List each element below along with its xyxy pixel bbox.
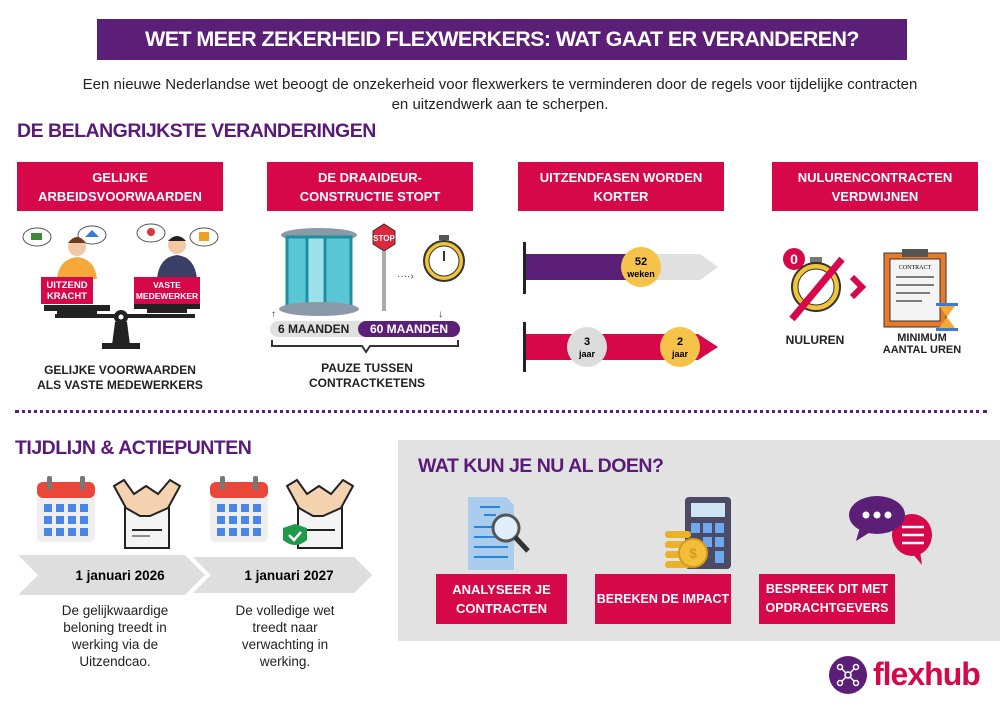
logo: flexhub: flexhub [873,656,980,692]
chevrons: dates: 1 januari 2027 [244,568,334,583]
revolving door, stop sign, stopwatch: ↓ [438,309,443,320]
caption: minimum aantal uren [883,332,961,356]
action: bespreek: OPDRACHTGEVERS [766,601,888,615]
chart: phases: jaar [671,349,689,359]
header: ARBEIDSVOORWAARDEN [38,188,202,204]
panel: nulurencontracten [772,162,978,356]
revolving door, stop sign, stopwatch: ····› [397,271,414,282]
caption: minimum aantal uren: AANTAL UREN [883,344,961,356]
caption: nuluren: NULUREN [786,333,844,347]
chart: phases: 3 [584,336,590,348]
caption: ALS VASTE MEDEWERKERS [37,378,203,392]
panel: draaideur [267,162,473,390]
icons: stopwatch crossed, contract: CONTRACT [899,265,931,271]
header [267,162,473,211]
label: uitzendkracht: KRACHT [47,290,87,302]
header: GELIJKE [92,170,148,184]
action: bereken: BEREKEN DE IMPACT [597,592,729,606]
bar: 6 / 60 maanden [270,321,460,337]
chevrons: dates [18,555,372,595]
label: uitzendkracht [41,277,93,304]
revolving door, stop sign, stopwatch: ↑ [271,309,276,320]
label: vaste medewerker [134,277,200,304]
icons: stopwatch crossed, contract: 0 [790,251,798,267]
header [518,162,724,211]
caption: PAUZE TUSSEN [321,361,413,375]
caption: GELIJKE VOORWAARDEN [44,363,196,377]
divider [15,410,987,413]
intro text [83,76,917,113]
scale illustration [22,224,218,349]
panel: wat kun je nu al doen [398,440,1000,641]
icon: calculator with coins: $ [689,545,697,561]
logo: flexhub [829,656,980,694]
action: analyseer: CONTRACTEN [456,601,547,616]
bar: 6 / 60 maanden: 6 MAANDEN [278,322,349,336]
label: vaste medewerker: MEDEWERKER [136,290,198,300]
chart: phases: 52 [635,256,647,268]
caption [37,363,203,392]
chevrons: dates: 1 januari 2026 [75,568,165,583]
header [17,162,223,211]
heading: belangrijkste veranderingen: DE BELANGRIJKSTE VERANDERINGEN [17,120,376,142]
60 maanden pill [358,321,460,337]
chart: phases: jaar [578,349,596,359]
chart: phases: weken [626,269,655,279]
icons: calendar + handshake (2x) [37,476,354,549]
header: UITZENDFASEN WORDEN [540,170,702,184]
header: DE DRAAIDEUR- [318,170,422,184]
label: uitzendkracht: UITZEND [46,280,88,290]
chart: phases [523,242,718,372]
icons: stopwatch crossed, contract [783,248,958,331]
60 maanden pill: 60 MAANDEN [370,322,448,336]
header: CONSTRUCTIE STOPT [300,188,440,204]
title: WET MEER ZEKERHEID FLEXWERKERS: WAT GAAT ER VERANDEREN? [145,27,859,51]
title [97,19,907,60]
revolving door, stop sign, stopwatch [271,223,465,320]
icon: document with magnifier [468,497,530,570]
text: 2027: De volledige wet treedt naar verwachting in werking. [235,603,335,669]
heading: WAT KUN JE NU AL DOEN? [418,455,663,477]
intro text: en uitzendwerk aan te scherpen. [392,96,608,113]
header: NULURENCONTRACTEN [798,170,952,184]
action: bespreek: BESPREEK DIT MET [766,582,888,596]
action: bereken [595,574,731,624]
caption [309,361,425,390]
header: VERDWIJNEN [832,188,918,204]
header [772,162,978,211]
header: KORTER [594,188,648,204]
icon: calculator with coins [665,497,731,569]
icon: chat bubbles [849,496,932,565]
chart: phases: 2 [677,336,683,348]
revolving door, stop sign, stopwatch: STOP [373,234,395,243]
action: analyseer: ANALYSEER JE [452,582,551,597]
label: vaste medewerker: VASTE [153,280,181,290]
panel: uitzendfasen [518,162,724,372]
intro text: Een nieuwe Nederlandse wet beoogt de onzekerheid voor flexwerkers te verminderen door de regels voor tijdelijke contracten [83,76,917,93]
action: analyseer [436,574,567,624]
action: bespreek [759,574,895,624]
timeline [18,476,372,669]
caption: CONTRACTKETENS [309,376,425,390]
caption: minimum aantal uren: MINIMUM [897,332,947,344]
panel: gelijke arbeidsvoorwaarden [17,162,223,392]
heading: tijdlijn: TIJDLIJN & ACTIEPUNTEN [15,437,251,459]
text: 2026: De gelijkwaardige beloning treedt in werking via de Uitzendcao. [62,603,168,669]
